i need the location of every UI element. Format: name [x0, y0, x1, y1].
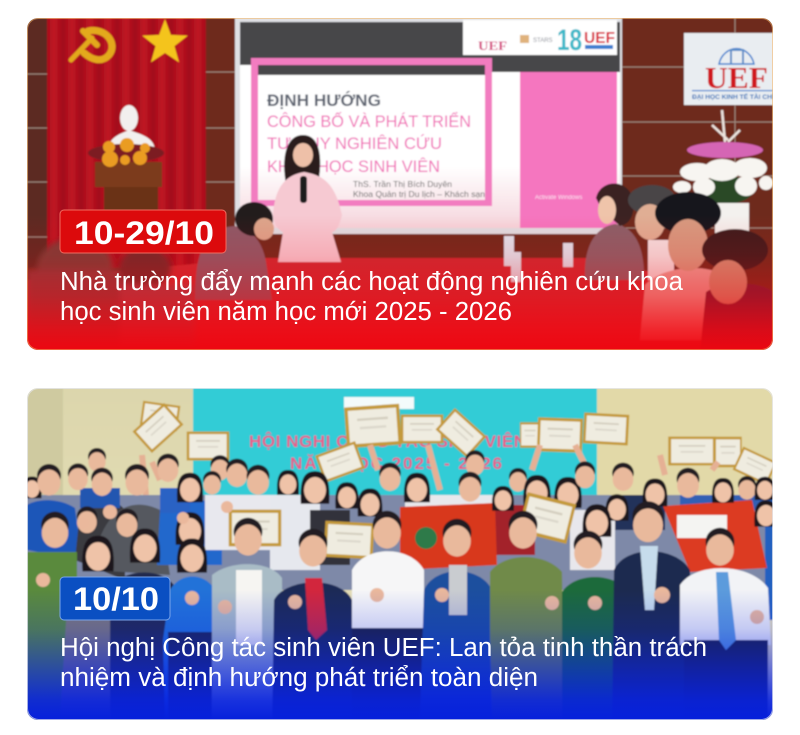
- slide title: ĐỊNH HƯỚNG: [267, 91, 381, 110]
- red gradient overlay: [27, 215, 773, 350]
- heading: card 2: [60, 634, 707, 692]
- front row heads: [41, 501, 734, 573]
- heading: card 1: [60, 268, 684, 326]
- front row people: [27, 546, 771, 722]
- slide title: ThS. Trần Thị Bích Duyên: [353, 179, 452, 189]
- slide title: Activate Windows: [535, 195, 582, 201]
- slide title: Khoa Quản trị Du lịch – Khách sạn: [353, 189, 485, 199]
- photo: seminar room with presenter: [27, 18, 783, 350]
- date badge: 10-29/10: [60, 210, 226, 253]
- teal event screen: [193, 388, 597, 503]
- teal event screen: NĂM HỌC 2025 - 2026: [290, 454, 502, 473]
- slide title: KHOA HỌC SINH VIÊN: [267, 157, 440, 176]
- projection screen: [235, 18, 622, 234]
- slide title: TƯ DUY NGHIÊN CỨU: [267, 134, 442, 153]
- card outline: [28, 388, 772, 720]
- raised certificates: [133, 401, 777, 485]
- date badge: 10-29/10: 10-29/10: [74, 215, 214, 251]
- foreground blurred people: [27, 238, 195, 350]
- panel: student affairs conference card: [22, 388, 778, 722]
- UEF sign: [684, 33, 783, 105]
- crowd bodies back row: [27, 488, 773, 620]
- UEF sign: UEF: [705, 60, 768, 95]
- podium: [94, 160, 163, 210]
- table: [28, 257, 700, 342]
- teal event screen: HỘI NGHỊ CÔNG TÁC SINH VIÊN: [249, 432, 526, 451]
- slide title: CÔNG BỐ VÀ PHÁT TRIỂN: [267, 111, 471, 131]
- slide pink frame: [251, 58, 492, 206]
- card outline: [28, 18, 772, 350]
- heading: card 2: nhiệm và định hướng phát triển toàn diện: [60, 664, 538, 692]
- hands making heart gesture: [36, 501, 764, 624]
- orchid flowers: [673, 110, 773, 233]
- slide logo bar: UEF: [584, 30, 615, 47]
- slide logo bar: STARS: [533, 38, 553, 44]
- slide logo bar: [463, 20, 617, 57]
- back row heads: [22, 448, 778, 545]
- water bottles: [504, 236, 573, 282]
- heading: card 1: Nhà trường đẩy mạnh các hoạt động nghiên cứu khoa: [60, 268, 684, 296]
- seated man left: [195, 202, 274, 300]
- bust statue: [108, 105, 155, 150]
- slide title: [267, 91, 582, 201]
- blue gradient overlay: [27, 590, 773, 720]
- slide logo bar: UEF: [478, 38, 507, 53]
- UEF sign: ĐẠI HỌC KINH TẾ TÀI CHÍNH: [692, 91, 783, 101]
- red banners: [400, 500, 767, 572]
- presenter: [273, 135, 342, 262]
- flowers on podium: [88, 138, 164, 167]
- icon: hammer and sickle: [71, 30, 112, 60]
- curtain: [47, 18, 206, 268]
- certificates held in crowd: [229, 492, 576, 559]
- heading: card 2: Hội nghị Công tác sinh viên UEF: Lan tỏa tinh thần trách: [60, 634, 707, 662]
- icon: yellow star: [142, 19, 188, 62]
- heading: card 1: học sinh viên năm học mới 2025 - 2026: [60, 298, 512, 326]
- date badge: 10/10: [60, 577, 170, 620]
- photo: group portrait: [22, 388, 778, 722]
- date badge: 10/10: 10/10: [73, 581, 159, 617]
- panel: research activities card: [27, 18, 783, 350]
- raised arms: [142, 445, 718, 495]
- slide logo bar: 18: [557, 24, 582, 57]
- seated people right: [585, 183, 773, 350]
